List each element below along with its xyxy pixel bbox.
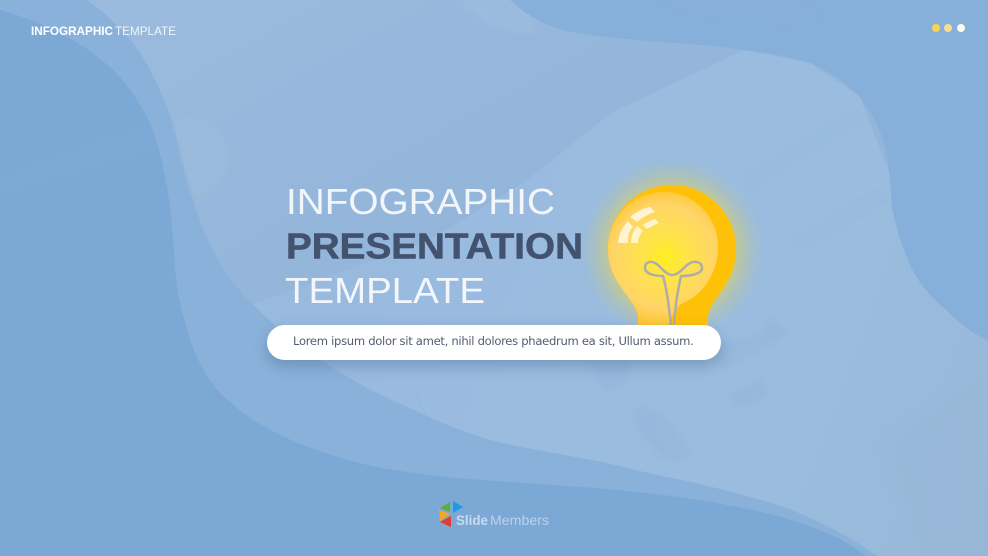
header label: TEMPLATE [115,26,176,38]
logo mark [439,501,463,527]
faint bottom-right fold [880,380,988,556]
header label [31,26,176,38]
icon: light bulb [580,158,764,342]
top-right darker wave [510,0,988,341]
faded paper shape [250,50,988,556]
logo: Slide Members [439,501,549,528]
bulb highlight [618,207,659,243]
bulb body [608,185,736,326]
callout pill [267,325,721,360]
faint light circle [173,115,228,203]
faint dark-wave highlight [0,128,160,195]
title: TEMPLATE [285,270,485,311]
title [285,181,583,311]
title: PRESENTATION [286,226,583,266]
top lighter blob [456,0,536,34]
bulb glow [580,158,764,342]
header label: INFOGRAPHIC [31,26,113,38]
logo: Slide Members: Slide [456,512,488,528]
pagination dots [932,24,965,32]
faint top-right fold [640,0,830,24]
title: INFOGRAPHIC [286,181,555,222]
bulb inner light [608,192,718,326]
filament [645,262,702,326]
logo: Slide Members: Members [490,512,549,528]
callout text: Lorem ipsum dolor sit amet, nihil dolores phaedrum ea sit, Ullum assum. [293,334,694,348]
faint blurred background document marks [590,110,886,461]
